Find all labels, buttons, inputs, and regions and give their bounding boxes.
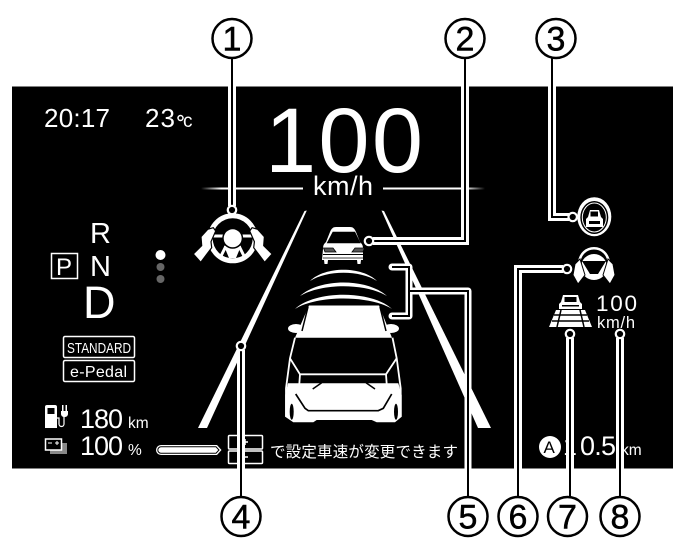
callout number 4 (222, 497, 260, 536)
range reading: km (128, 415, 149, 432)
trip label A (539, 436, 561, 458)
steering switch icon (228, 436, 262, 464)
callout number 2 (446, 19, 484, 58)
trip distance (563, 431, 642, 461)
battery percentage: % (128, 442, 142, 459)
icon: steering assist (573, 248, 615, 284)
callout number 1: 1 (223, 20, 241, 58)
trip label A: A (544, 438, 556, 457)
set speed unit: km/h (597, 314, 635, 332)
range reading (80, 404, 149, 434)
trip distance: 0.5 (580, 431, 616, 461)
callout number 1 (212, 19, 252, 58)
battery percentage (80, 431, 142, 461)
leader 4 (237, 342, 245, 497)
callout number 6 (498, 497, 538, 536)
slider bar inner outline (158, 447, 219, 453)
outside temperature: 23 (145, 103, 175, 133)
leader 1 (228, 58, 236, 214)
callout number 2: 2 (456, 20, 474, 58)
slider bar (156, 445, 222, 455)
callout number 3 (536, 19, 576, 58)
panel: display screen (12, 86, 673, 468)
icon: cruise control car and lane (549, 295, 592, 327)
clock: 20:17 (44, 103, 110, 133)
road lane left (198, 210, 307, 428)
leader 6 (518, 265, 571, 497)
callout number 5 (448, 497, 488, 536)
set speed: 100 (596, 291, 637, 316)
road lane right (382, 210, 491, 428)
gear selector: D (83, 277, 116, 328)
gear selector: R (90, 218, 111, 250)
callout number 7: 7 (558, 498, 577, 536)
callout number 7 (548, 497, 587, 536)
speed divider (201, 188, 485, 190)
radar waves (295, 270, 392, 309)
trip distance: km (621, 442, 642, 459)
icon: lane keeping car in oval (577, 197, 611, 236)
vehicle ahead (322, 227, 365, 264)
drive mode dots (156, 250, 166, 283)
drive mode badge: STANDARD: STANDARD (67, 340, 131, 357)
callout number 8: 8 (611, 498, 629, 536)
callout number 8 (600, 497, 640, 536)
range reading: 180 (80, 404, 123, 434)
callout number 3: 3 (547, 20, 565, 58)
leader 5 (392, 267, 468, 497)
leader 2 (365, 58, 465, 245)
callout number 5: 5 (459, 498, 477, 536)
outside temperature (145, 103, 192, 133)
leader 3 (552, 58, 577, 221)
outside temperature: c (183, 111, 192, 132)
gear selector: N (90, 251, 111, 283)
leader 7 (566, 330, 574, 497)
callout number 6: 6 (509, 498, 527, 536)
drive mode badge: e-Pedal: e-Pedal (70, 364, 127, 381)
guidance message: で設定車速が変更できます (270, 443, 458, 461)
icon: battery (46, 439, 67, 454)
icon: hands on steering wheel (193, 216, 272, 262)
icon: charging pump (45, 405, 68, 428)
gear selector: P (56, 254, 72, 281)
leader 8 (616, 330, 624, 497)
speed unit: km/h (313, 171, 373, 201)
drive mode badge: STANDARD (64, 336, 134, 358)
speed reading: 100 (265, 90, 423, 192)
gear selector (52, 218, 116, 328)
callout number 4: 4 (232, 498, 250, 536)
drive mode badge: e-Pedal (64, 360, 134, 382)
battery percentage: 100 (80, 431, 123, 461)
own vehicle (285, 306, 402, 422)
trip distance: 1 (563, 433, 577, 461)
